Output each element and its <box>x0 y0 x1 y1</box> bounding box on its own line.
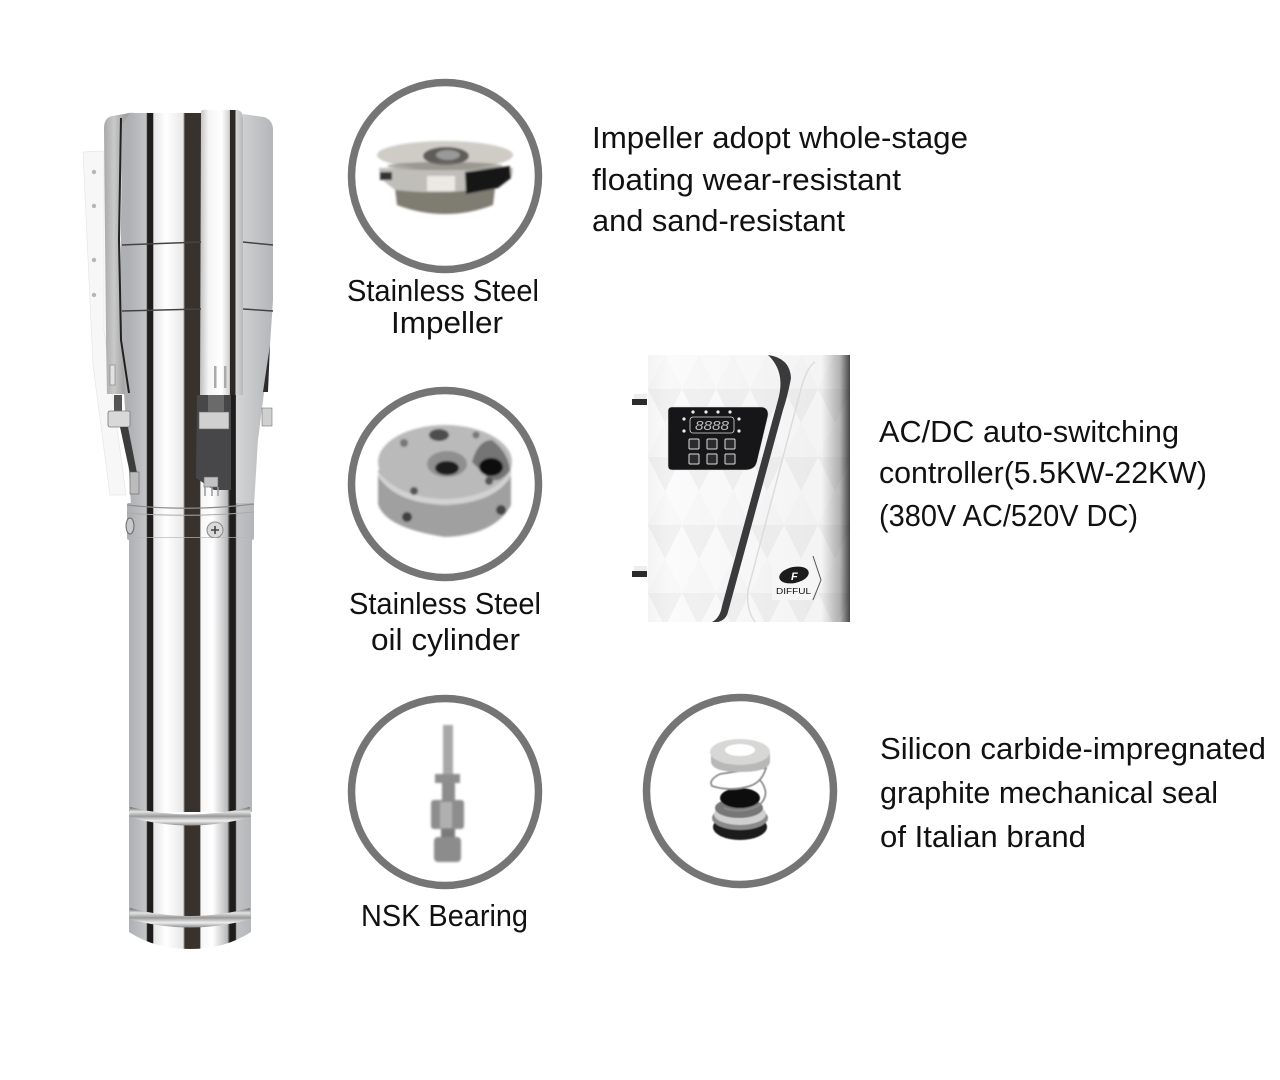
circle ring <box>352 390 538 578</box>
callout: controller description: AC/DC auto-switching <box>879 414 1179 449</box>
callout: controller description: (380V AC/520V DC) <box>879 498 1138 533</box>
left strap <box>104 113 130 394</box>
left bolt <box>108 395 139 494</box>
right strap <box>200 110 243 395</box>
lower cylinder <box>129 538 252 812</box>
callout: seal description: graphite mechanical seal <box>880 775 1218 810</box>
mounting bracket <box>83 151 126 495</box>
label <box>347 273 539 340</box>
latch top <box>632 394 647 405</box>
digit display: 8888 <box>695 418 730 433</box>
screws <box>126 518 223 538</box>
label: Impeller <box>391 305 503 340</box>
callout: controller description: controller(5.5KW-22KW) <box>879 455 1207 490</box>
curved door seam <box>712 355 791 622</box>
bottom ring <box>129 908 251 928</box>
callout: impeller description: floating wear-resistant <box>592 162 901 197</box>
label: Stainless Steel <box>349 586 541 621</box>
icon: oil cylinder <box>378 425 512 537</box>
label: oil cylinder <box>371 622 520 657</box>
callout: seal description: Silicon carbide-impregnated <box>880 731 1266 766</box>
latch bottom <box>632 566 647 577</box>
lower section <box>129 815 251 932</box>
upper wide dark band <box>186 113 202 413</box>
right side shell <box>236 114 273 505</box>
panel: controller product image <box>632 355 850 622</box>
brand badge: F <box>791 571 798 583</box>
label: NSK Bearing <box>361 898 528 933</box>
bracket holes <box>92 170 96 297</box>
panel: mechanical seal <box>646 698 834 884</box>
centre bolt window <box>196 395 231 496</box>
callout: impeller description: Impeller adopt whole-stage <box>592 120 968 155</box>
keypad <box>689 439 735 464</box>
status lights <box>682 410 741 433</box>
callout: controller description <box>879 414 1207 533</box>
callout: seal description: of Italian brand <box>880 819 1086 854</box>
circle ring <box>646 698 834 884</box>
callout: seal description <box>880 731 1266 854</box>
circle ring <box>352 82 538 270</box>
label: Stainless Steel <box>347 273 539 308</box>
panel: NSK bearing <box>352 698 538 933</box>
controller body with diamond texture <box>648 355 850 622</box>
callout: impeller description: and sand-resistant <box>592 203 845 238</box>
main upper body <box>120 113 236 505</box>
pump product image <box>83 110 273 949</box>
right clamp hardware <box>262 345 272 426</box>
pump base <box>129 922 251 949</box>
label <box>349 586 541 657</box>
collar <box>127 503 254 540</box>
ring joint <box>129 807 251 826</box>
display panel <box>668 407 768 470</box>
shell seams <box>122 242 273 311</box>
right edge shading <box>648 355 850 622</box>
door highlight <box>748 362 815 622</box>
icon: mechanical seal <box>710 739 770 840</box>
brand badge: DIFFUL <box>776 587 812 596</box>
icon: impeller <box>377 141 513 214</box>
callout: impeller description <box>592 120 968 238</box>
brand badge <box>772 556 821 600</box>
panel: stainless steel impeller <box>347 82 539 340</box>
circle ring <box>352 698 538 886</box>
panel: stainless steel oil cylinder <box>349 390 541 657</box>
icon: bearing shaft <box>431 725 464 862</box>
